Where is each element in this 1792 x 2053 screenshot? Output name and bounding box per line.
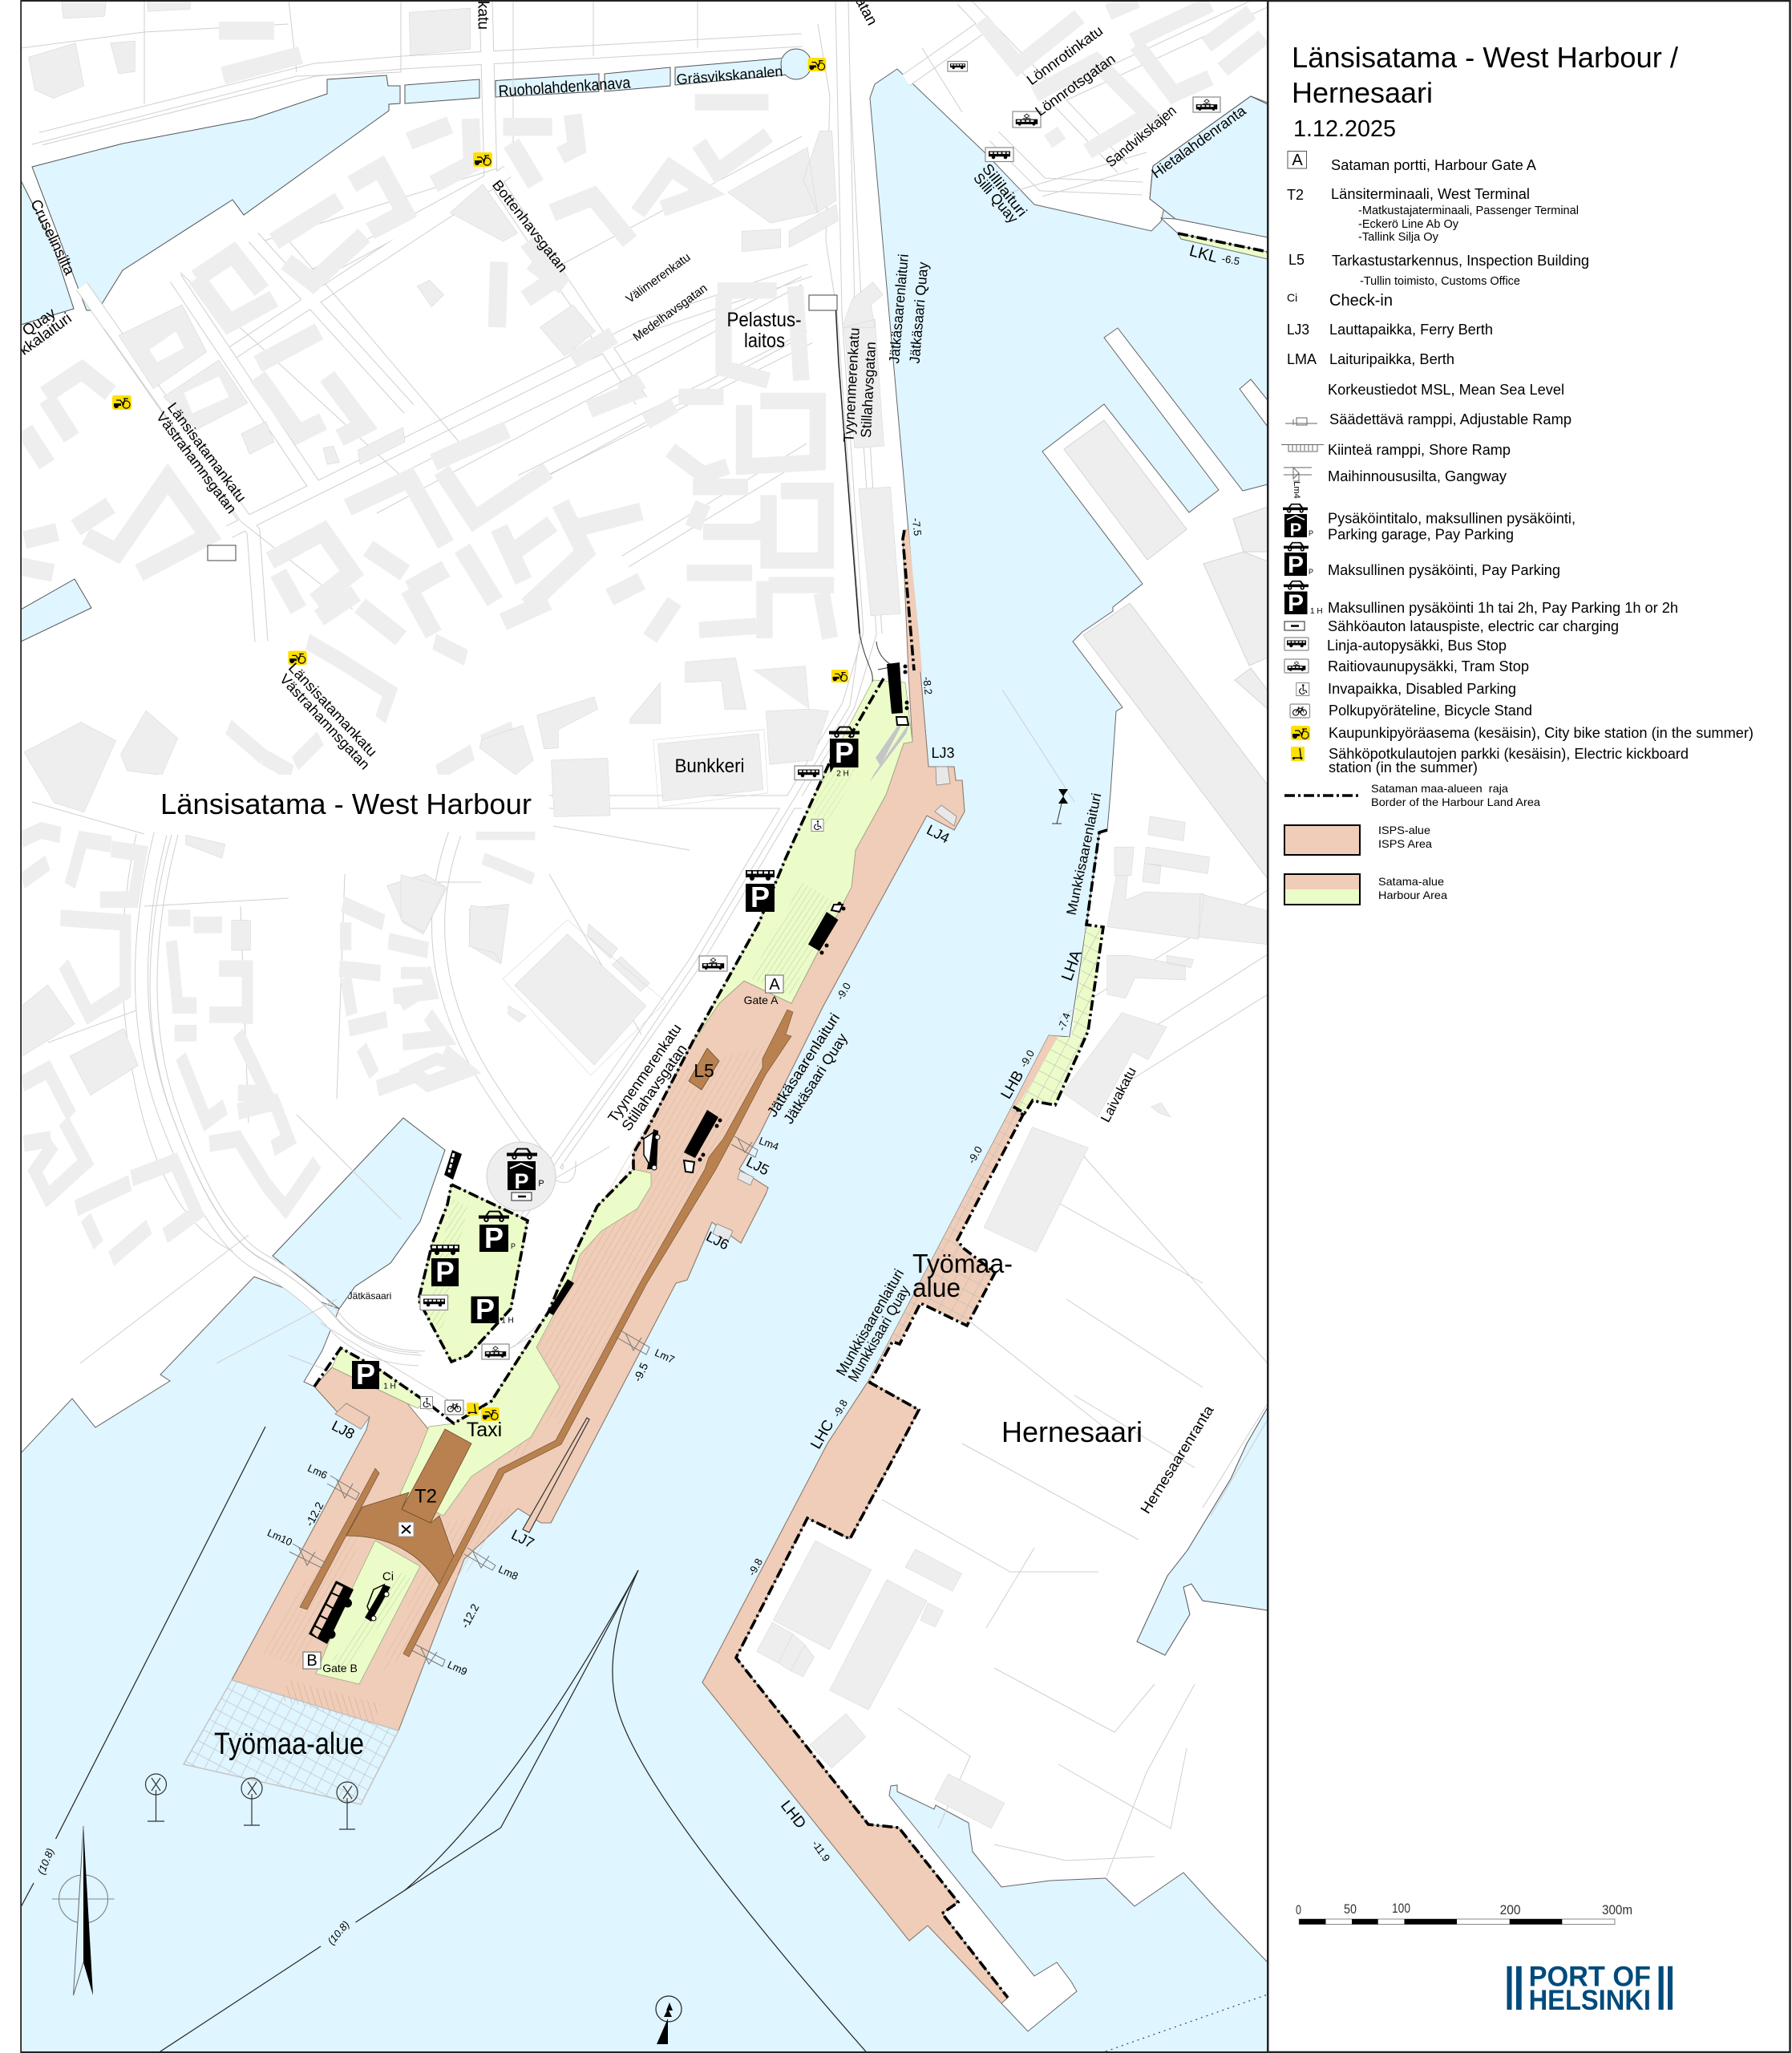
sector mark [1052,789,1068,824]
place names: L5 [694,1060,714,1081]
legend: pay parking 1h or 2h: P [1288,590,1304,617]
place names: Hernesaari [1001,1415,1143,1448]
legend: Berth: LMA [1287,351,1317,367]
sea marks [146,1774,358,1829]
depth figures: -9.0 [965,1144,985,1165]
electric kickboard station [467,1403,479,1415]
place names: T2 [415,1485,437,1508]
legend: kickboard: station (in the summer) [1329,759,1478,775]
parking 1H: P [475,1293,495,1326]
street and canal names: Jätkäsaarenlaituri [886,253,912,364]
main area label: Länsisatama - West Harbour [160,788,532,820]
legend: pay parking 1h or 2h [1284,581,1678,617]
street and canal names: Hernesaarenranta [1137,1402,1217,1516]
street and canal names: Välimerenkatu [624,250,693,306]
street and canal names: Stillahavsgatan [618,1041,690,1134]
legend: pay parking: P [1288,552,1304,578]
gate B: Gate B [322,1662,358,1674]
parking 2H [829,727,860,778]
legend: city bike: Kaupunkipyöräasema (kesäisin), City bike station (in the summer) [1329,724,1754,741]
legend: harbour gate: Sataman portti, Harbour Gate A [1331,156,1537,173]
berth labels: Lm6 [305,1462,330,1481]
vehicle: bus by basin [444,1150,462,1180]
legend: West Terminal: Länsiterminaali, West Terminal [1331,185,1530,202]
vehicle: truck middle [808,901,845,954]
legend: West Terminal: T2 [1287,187,1304,203]
place names: laitos [744,330,785,352]
legend: tram stop: Raitiovaunupysäkki, Tram Stop [1328,658,1529,674]
legend title: 1.12.2025 [1293,116,1396,142]
legend: sea level: Korkeustiedot MSL, Mean Sea Level [1328,381,1564,398]
legend: Inspection Building: -Tullin toimisto, Customs Office [1360,274,1520,288]
Port of Helsinki logo: HELSINKI [1529,1985,1651,2016]
water: top-left bay [32,75,400,310]
street and canal names: Västrahamnsgatan [277,671,373,772]
land: west and north [21,0,1268,1731]
north arrow [656,1996,682,2044]
street and canal names: Lönnrotsgatan [1032,51,1118,119]
legend: gangway: Maihinnoususilta, Gangway [1328,468,1507,484]
vehicle: truck north [887,662,909,725]
parking with bus west [431,1245,459,1288]
map [10,0,1268,2052]
garage parking circle [487,1142,556,1211]
parking 1H lower [352,1358,396,1391]
gangway structures [289,1136,758,1666]
scale bar [1296,1901,1632,1925]
berth labels: LJ4 [924,821,952,847]
water: left edge patches [21,180,91,642]
street and canal names: Quay [19,305,59,340]
berth labels: LJ3 [931,745,955,761]
restaurant icon [398,1522,414,1537]
Harbour area: small green at P 1H [332,1348,425,1408]
vehicle: car near L5 [644,1129,660,1170]
top narrow ISPS strip [903,530,922,672]
legend: pay parking 1h or 2h: Maksullinen pysäköinti 1h tai 2h, Pay Parking 1h or 2h [1328,599,1678,616]
bus stops [420,61,1013,1310]
scale bar: 0 [1296,1902,1301,1917]
legend: land border: Sataman maa-alueen raja [1371,782,1508,795]
parking 1H [471,1293,514,1326]
depth figures: (10.8) [325,1918,352,1947]
legend: West Terminal: -Eckerö Line Ab Oy [1358,217,1458,231]
berth labels: Lm7 [653,1346,677,1366]
land: east piers and Hernesaari [702,328,1268,2031]
legend: ISPS area: ISPS Area [1378,837,1432,850]
east ISPS with lattice [868,1107,1023,1383]
Harbour area: middle green [400,1169,651,1516]
legend: Harbour area: Harbour Area [1378,889,1447,901]
green parking hatches [333,714,910,1672]
parking 1H lower: 1 H [383,1383,396,1391]
legend: disabled parking: Invapaikka, Disabled Parking [1328,680,1516,697]
east ISPS: lower quay [702,1381,1008,2003]
legend title: Länsisatama - West Harbour / [1292,41,1678,74]
street and canal names: Sillilaituri [979,160,1030,220]
legend: electric car charging: Sähköauton latauspiste, electric car charging [1328,618,1619,634]
depth figures: -7.5 [910,517,924,537]
buildings: Hernesaari south [757,1541,1005,1828]
east berth: lattice LHA/LHB [1012,925,1103,1113]
berth structures LJ [335,767,957,1429]
vehicle: big bus south [309,1581,354,1644]
legend: Harbour area: Satama-alue [1378,875,1444,888]
lane markings [261,1043,778,1724]
street and canal names: Munkkisaarenlaituri [833,1266,907,1379]
legend: harbour gate: A [1292,152,1303,169]
legend: ISPS area [1284,824,1432,855]
city bike stations [112,58,848,1421]
legend: parking garage: Parking garage, Pay Parking [1328,526,1514,542]
legend: pay parking [1284,542,1560,578]
street and canal names: Sandvikskajen [1102,103,1179,170]
berth labels: LHD [777,1798,809,1832]
legend: pay parking 1h or 2h: 1 H [1310,607,1323,616]
street and canal names: kkalaituri [16,310,75,359]
berth labels: LJ6 [704,1228,731,1253]
scale bar: 100 [1392,1901,1410,1916]
parking 1H: 1 H [501,1317,514,1325]
legend title [1292,41,1678,142]
gate A: A [769,976,780,994]
legend: shore ramp: Kiinteä ramppi, Shore Ramp [1328,441,1511,458]
depth figures: -8.2 [920,676,935,695]
legend: West Terminal: -Matkustajaterminaali, Passenger Terminal [1358,204,1579,217]
place names: Jätkäsaari [348,1290,391,1302]
depth figures: (10.8) [35,1846,56,1877]
street and canal names [16,0,1249,1516]
legend: kickboard: Sähköpotkulautojen parkki (kesäisin), Electric kickboard [1329,745,1689,762]
street and canal names: Tyynenmerenkatu [605,1021,685,1125]
berth labels: LKL [1187,242,1220,266]
street and canal names: Silli Quay [970,170,1021,226]
tram stops [482,97,1220,1359]
depth figures: -6.5 [1221,253,1240,267]
berth labels: LHA [1058,947,1086,983]
street and canal names: Stillahavsgatan [858,342,879,438]
garage parking circle: P [538,1179,544,1188]
legend: ISPS area: ISPS-alue [1378,824,1430,836]
depth figures: -9.5 [631,1360,650,1383]
legend: Harbour area [1284,874,1447,905]
street and canal names: Hietalahdenranta [1148,102,1249,181]
quay service strip near LJ7 [523,1418,589,1533]
depth figures: -9.0 [1017,1048,1037,1069]
map labels [16,0,1249,1947]
legend: gangway: Lm4 [1292,481,1301,499]
legend: bicycle stand: Polkupyöräteline, Bicycle Stand [1329,702,1532,719]
water: Hietalahti basin [1150,96,1268,237]
legend: West Terminal: -Tallink Silja Oy [1358,230,1438,244]
berth labels: LHB [998,1068,1027,1102]
legend: Inspection Building: Tarkastustarkennus, Inspection Building [1332,252,1589,269]
street and canal names: Munkkisaari Quay [845,1283,912,1384]
legend: gangway [1284,468,1507,499]
water: canal segments [405,49,811,103]
work area lattice: Jätkäsaari south [184,1680,398,1804]
buildings: Munkkisaari [984,816,1267,1252]
legend divider [1267,1,1268,2052]
legend: pay parking: Maksullinen pysäköinti, Pay Parking [1328,561,1560,578]
legend: bus stop: Linja-autopysäkki, Bus Stop [1327,637,1507,654]
berth labels: LJ8 [330,1417,357,1443]
legend: Inspection Building [1288,252,1589,288]
navigation lines at sea [21,1427,867,2052]
parking 2H: P [835,736,854,769]
depth figures: -12.2 [458,1602,482,1630]
place names: alue [912,1273,961,1302]
street and canal names: Munkkisaarenlaituri [1064,792,1104,917]
parking with bus [746,870,775,913]
gate B: B [306,1652,318,1670]
legend panel [1281,41,1754,2016]
bicycle stand [445,1400,463,1415]
street and canal names: Ruoholahdenkanava [498,75,632,100]
legend title: Hernesaari [1292,76,1433,109]
scale bar: 200 [1500,1902,1521,1917]
gangway corridors [300,1010,793,1657]
legend: harbour gate [1288,151,1537,173]
place names: Bunkkeri [675,755,744,777]
street and canal names: Tyynenmerenkatu [840,327,863,443]
legend: parking garage: P [1290,520,1301,540]
compass rose [52,1826,114,1995]
street and canal names: Jätkäsaari Quay [907,261,931,364]
scale bar: 300m [1602,1902,1632,1917]
street and canal names: Västrahamnsgatan [153,409,240,516]
harbour land border line [314,530,1107,1998]
street and canal names: Jätkäsaarenlaituri [764,1010,843,1120]
main area label [147,775,549,832]
berth labels: Lm9 [446,1658,469,1678]
legend: pay parking: P [1309,568,1313,576]
vehicle: truck east road [548,1279,574,1315]
street and canal names: Gräsvikskanalen [676,63,783,87]
berth labels: Lm4 [758,1135,780,1152]
berth labels: LHC [807,1417,838,1452]
depth figures: -7.4 [1055,1011,1073,1032]
street and canal names: katu [475,1,491,30]
black road line Tyynenmerenkatu [835,310,860,634]
empty sign frames [208,295,837,561]
berth labels [265,242,1220,1832]
buildings: upper middle [637,0,1264,638]
street and canal names: Laivakatu [1098,1064,1139,1125]
water background [22,2,1268,2051]
legend: Berth: Laituripaikka, Berth [1329,350,1454,367]
street and canal names: Cruselinsilta [26,197,78,278]
depth figures: -9.8 [831,1398,850,1419]
legend: kickboard [1291,745,1689,775]
street corridors [41,0,1268,1359]
Harbour area: south green [316,1541,420,1684]
legend: parking garage [1283,504,1576,542]
place names [214,309,1143,1761]
buildings: east piers [1064,420,1268,879]
pier strip and LKL berth [1161,218,1268,259]
parking with bus west: P [435,1257,455,1288]
Harbour area: parking green [419,1184,528,1362]
legend: West Terminal [1287,185,1579,244]
gate B [303,1652,358,1674]
parking 2H: 2 H [836,770,849,778]
legend: Check-in [1287,291,1393,310]
berth labels: LJ7 [509,1526,536,1552]
garage parking circle: P [514,1169,529,1193]
parking 1H lower: P [356,1358,375,1391]
street and canal names: Jätkäsaari Quay [780,1031,851,1127]
depth figures: -9.0 [834,981,853,1002]
road curves near LJ3 [860,634,898,682]
Harbour area: main green [690,680,912,1047]
street and canal names: Länsisatamankatu [285,660,380,759]
place names: Työmaa- [912,1249,1013,1278]
legend: parking garage: Pysäköintitalo, maksullinen pysäköinti, [1328,510,1576,526]
berth labels: LJ5 [744,1153,771,1179]
small pier [1240,379,1268,427]
place names: Taxi [467,1419,502,1441]
depth figures: -11.9 [810,1838,832,1864]
depth figures: -9.8 [746,1557,765,1577]
depth figures: -12.2 [302,1500,326,1529]
parking with car [479,1211,516,1254]
street and canal names: Länsisatamankatu [164,399,249,505]
legend: Check-in: Ci [1287,291,1297,304]
parking with car: P [484,1221,504,1254]
street and canal names: Lönnrotinkatu [1024,22,1106,88]
place names: Työmaa-alue [214,1727,364,1761]
place names: Pelastus- [726,309,802,331]
dotted line [1106,1994,1268,2051]
depth figures [35,253,1240,1947]
scale bar: 50 [1344,1901,1357,1917]
street and canal names: Medelhavsgatan [631,281,710,344]
vehicle: car south [365,1585,390,1622]
legend: Inspection Building: L5 [1288,252,1305,268]
Port of Helsinki logo: PORT OF [1529,1962,1651,1993]
ISPS area fill [232,530,965,1731]
water: Jätkäsaari inner basin [273,1118,445,1309]
legend: Ferry Berth: LJ3 [1287,322,1309,338]
berth labels: Lm8 [496,1563,520,1582]
vehicle: truck by L5 [684,1110,722,1172]
legend: parking garage: P [1309,529,1313,537]
legend: Ferry Berth: Lauttapaikka, Ferry Berth [1329,321,1493,338]
road network lines [21,0,1268,1877]
legend: land border [1284,782,1540,808]
berth labels: Lm10 [265,1526,294,1549]
legend: Check-in: Check-in [1329,292,1393,310]
water: Hernesaari right-side bay [1137,1407,1268,1655]
legend: land border: Border of the Harbour Land Area [1371,796,1540,808]
street and canal names: Bottenhavsgatan [489,177,571,275]
building L5 [689,1048,719,1090]
Port of Helsinki logo [1507,1962,1673,2016]
buildings: central area [401,658,828,1075]
parking with bus: P [750,881,770,913]
gate A [744,975,783,1006]
parking with car: P [511,1242,516,1250]
buildings: south-west quarter [21,642,513,1259]
terminal T2 [346,1429,471,1585]
buildings: north-west quarter [10,0,641,638]
gate A: Gate A [744,994,779,1006]
legend: adjustable ramp: Säädettävä ramppi, Adjustable Ramp [1329,411,1572,427]
accessible parking icons [420,819,823,1409]
place names: Ci [382,1570,394,1583]
